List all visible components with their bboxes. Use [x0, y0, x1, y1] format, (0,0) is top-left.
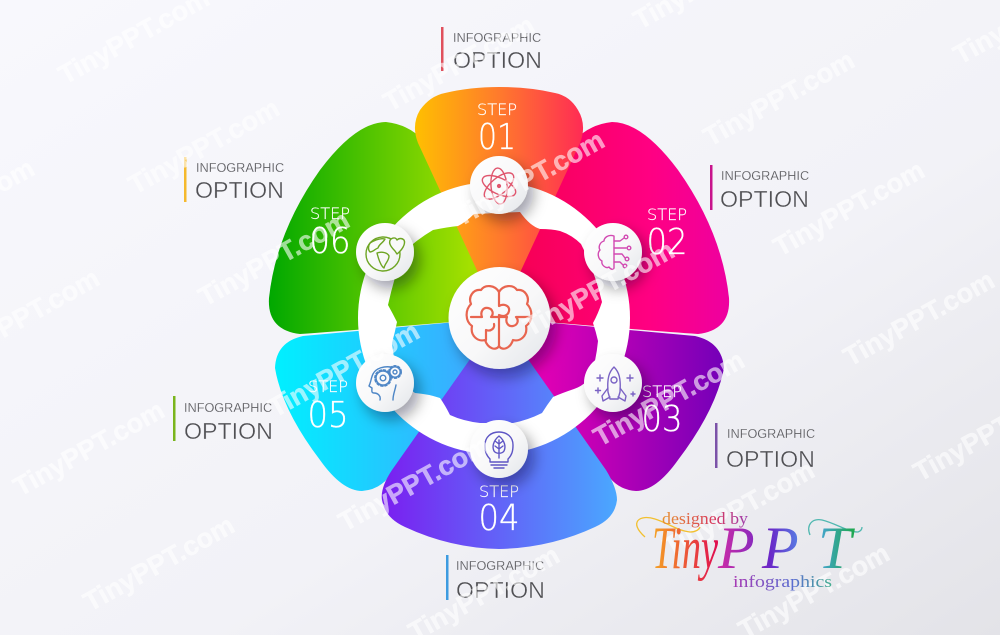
step 03 label [642, 382, 682, 440]
icon disc 04 leaf bulb [470, 420, 528, 478]
option label left upper: INFOGRAPHIC [196, 161, 284, 175]
step 06 label [310, 204, 350, 262]
icon disc 03 rocket [584, 354, 642, 412]
step 01 label [477, 100, 517, 158]
watermark: TinyPPT.com [448, 125, 609, 232]
option label right lower: INFOGRAPHIC [727, 427, 815, 441]
option label right upper: INFOGRAPHIC [721, 169, 809, 183]
step 01 label: STEP [477, 100, 517, 119]
watermark: TinyPPT.com [333, 430, 494, 537]
watermark: TinyPPT.com [78, 510, 239, 617]
petal 03 purple [499, 318, 724, 491]
option label bottom: OPTION [456, 577, 545, 603]
step 06 label: 06 [310, 221, 350, 262]
watermark: TinyPPT.com [378, 10, 539, 117]
icon disc 01 atom [470, 156, 528, 214]
designer logo: PPT [717, 515, 855, 581]
watermark: TinyPPT.com [193, 205, 354, 312]
option label left lower: OPTION [184, 418, 273, 444]
watermark: TinyPPT.com [768, 155, 929, 262]
designer logo [637, 509, 862, 591]
option label right upper [710, 165, 809, 212]
option label top: OPTION [453, 47, 542, 73]
watermark: TinyPPT.com [698, 45, 859, 152]
step 06 label: STEP [310, 204, 350, 223]
option label left lower [173, 396, 273, 444]
step 05 label: STEP [308, 377, 348, 396]
center disc with puzzle brain icon [448, 267, 550, 369]
step 05 label: 05 [308, 395, 348, 436]
watermark: TinyPPT.com [658, 455, 819, 562]
petal 02 pink [499, 122, 729, 334]
petal 05 cyan [275, 318, 499, 491]
option label left upper [184, 157, 284, 203]
designer logo: designed by [662, 509, 749, 528]
option label bottom [446, 555, 545, 603]
designer logo: infographics [733, 572, 832, 591]
option label right lower: OPTION [726, 446, 815, 472]
option label right lower [715, 423, 815, 472]
step 04 label [478, 482, 520, 539]
option label top: INFOGRAPHIC [453, 31, 541, 45]
step 02 label [646, 205, 688, 263]
icon disc 06 globe with heart [356, 223, 414, 281]
watermark: TinyPPT.com [838, 265, 999, 372]
option label left upper: OPTION [195, 177, 284, 203]
watermark: TinyPPT.com [263, 316, 424, 423]
petal 06 green [269, 122, 499, 334]
step 04 label: 04 [478, 498, 520, 539]
option label right upper: OPTION [720, 186, 809, 212]
petal 01 orange [415, 87, 583, 318]
step 04 label: STEP [479, 482, 519, 501]
step 03 label: 03 [642, 399, 682, 440]
watermark: TinyPPT.com [588, 345, 749, 452]
step 03 label: STEP [642, 382, 682, 401]
option label top [441, 27, 542, 73]
watermark: TinyPPT.com [518, 235, 679, 342]
option label bottom: INFOGRAPHIC [456, 559, 544, 573]
icon disc 05 head with gears [356, 354, 414, 412]
option label left lower: INFOGRAPHIC [184, 401, 272, 415]
watermark: TinyPPT.com [8, 395, 169, 502]
step 05 label [308, 377, 348, 436]
white ring [358, 182, 630, 454]
watermark: TinyPPT.com [123, 93, 284, 200]
step 02 label: STEP [647, 205, 687, 224]
designer logo: Tiny [652, 515, 718, 581]
icon disc 02 circuit brain [584, 223, 642, 281]
step 01 label: 01 [478, 117, 516, 158]
step 02 label: 02 [646, 222, 688, 263]
petal 04 violet blue [382, 318, 617, 549]
